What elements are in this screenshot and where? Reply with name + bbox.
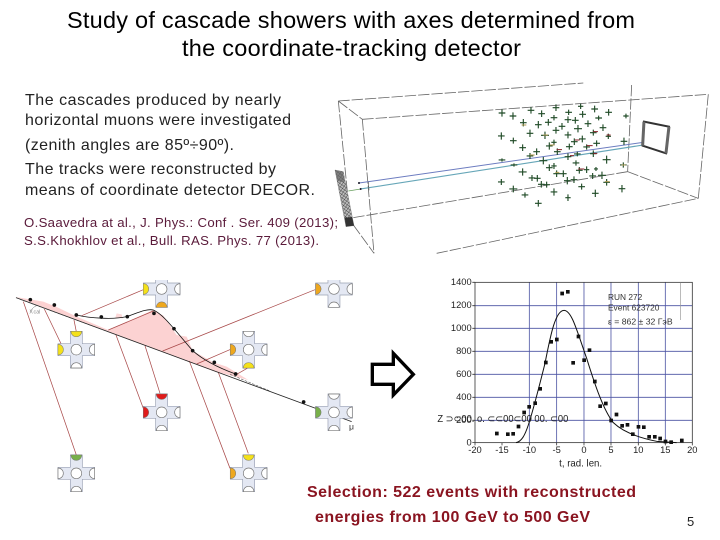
page number: 5 (687, 514, 694, 529)
y axis labels: 0 (466, 438, 472, 448)
module: far right (316, 394, 352, 431)
muon axis (16, 298, 352, 422)
y axis labels: 200 (456, 415, 472, 425)
overlapping axis glyphs: Z ⊃⊂00. o. ⊂⊂00⊂00 00. ⊂00 (437, 414, 569, 425)
arrow (372, 353, 413, 395)
text block: citations (24, 215, 338, 248)
run info: RUN 272 (608, 292, 643, 302)
x axis labels: -5 (553, 445, 561, 455)
x axis labels (468, 445, 698, 469)
axis ticks (472, 282, 692, 445)
detector 3D event display (335, 83, 708, 253)
text block: description: means of coordinate detector DECOR. (25, 182, 315, 199)
y axis labels: 800 (456, 346, 472, 356)
module: top centre (143, 280, 180, 308)
x axis labels: 5 (608, 445, 614, 455)
text block: citations: O.Saavedra at al., J. Phys.: Conf . Ser. 409 (2013); (24, 215, 338, 230)
module: bottom left (58, 455, 95, 492)
y axis labels: 1200 (451, 300, 472, 310)
y axis labels: 1000 (451, 323, 472, 333)
text block: description: horizontal muons were investigated (25, 112, 291, 129)
x axis labels: 15 (660, 445, 671, 455)
longitudinal curve (77, 310, 236, 374)
x axis labels: -20 (468, 445, 482, 455)
x axis labels: t, rad. len. (559, 458, 602, 469)
title: the coordinate-tracking detector (182, 35, 521, 61)
shower reconstruction schematic: μ (349, 422, 354, 432)
text block: description: The cascades produced by nearly (25, 92, 281, 109)
title (67, 7, 635, 61)
fit curve (516, 310, 677, 443)
title: Study of cascade showers with axes determined from (67, 7, 635, 33)
shower profile area (16, 297, 248, 380)
small labels (30, 306, 37, 312)
module: top right (315, 280, 353, 308)
muon detector square right (643, 122, 669, 153)
text block: description (25, 92, 315, 199)
x axis labels: 20 (687, 445, 698, 455)
y axis labels: 1400 (451, 277, 472, 287)
text block: description: The tracks were reconstructed by (25, 161, 276, 178)
selection note: Selection: 522 events with reconstructed (307, 484, 636, 501)
selection note: energies from 100 GeV to 500 GeV (315, 509, 590, 526)
y axis labels: 600 (456, 369, 472, 379)
text block: citations: S.S.Khokhlov et al., Bull. RAS. Phys. 77 (2013). (24, 233, 319, 248)
hit crosses (498, 104, 629, 207)
module: bottom centre (230, 455, 267, 492)
muon tracks (348, 142, 643, 191)
x axis labels: -15 (495, 445, 509, 455)
x axis labels: 0 (581, 445, 587, 455)
run info: ε = 862 ± 32 ГэВ (608, 316, 673, 326)
grid lines (475, 282, 692, 443)
shower reconstruction schematic: Xcal (29, 309, 40, 315)
selection note (307, 484, 636, 526)
module: centre red (143, 394, 180, 431)
text block: description: (zenith angles are 85º÷90º). (25, 137, 234, 154)
y axis labels: 400 (456, 392, 472, 402)
data points (495, 290, 684, 444)
module: middle right (230, 331, 267, 368)
y axis labels (451, 277, 472, 448)
run info: Event 623720 (608, 303, 660, 313)
run info (608, 292, 673, 326)
muon detector plane left (335, 170, 354, 227)
shower reconstruction schematic (16, 271, 354, 492)
curve points (28, 298, 305, 404)
chart: cascade profile (437, 277, 698, 469)
module: upper left (58, 331, 95, 368)
x axis labels: -10 (523, 445, 536, 455)
x axis labels: 10 (633, 445, 644, 455)
red connector lines (23, 290, 315, 468)
